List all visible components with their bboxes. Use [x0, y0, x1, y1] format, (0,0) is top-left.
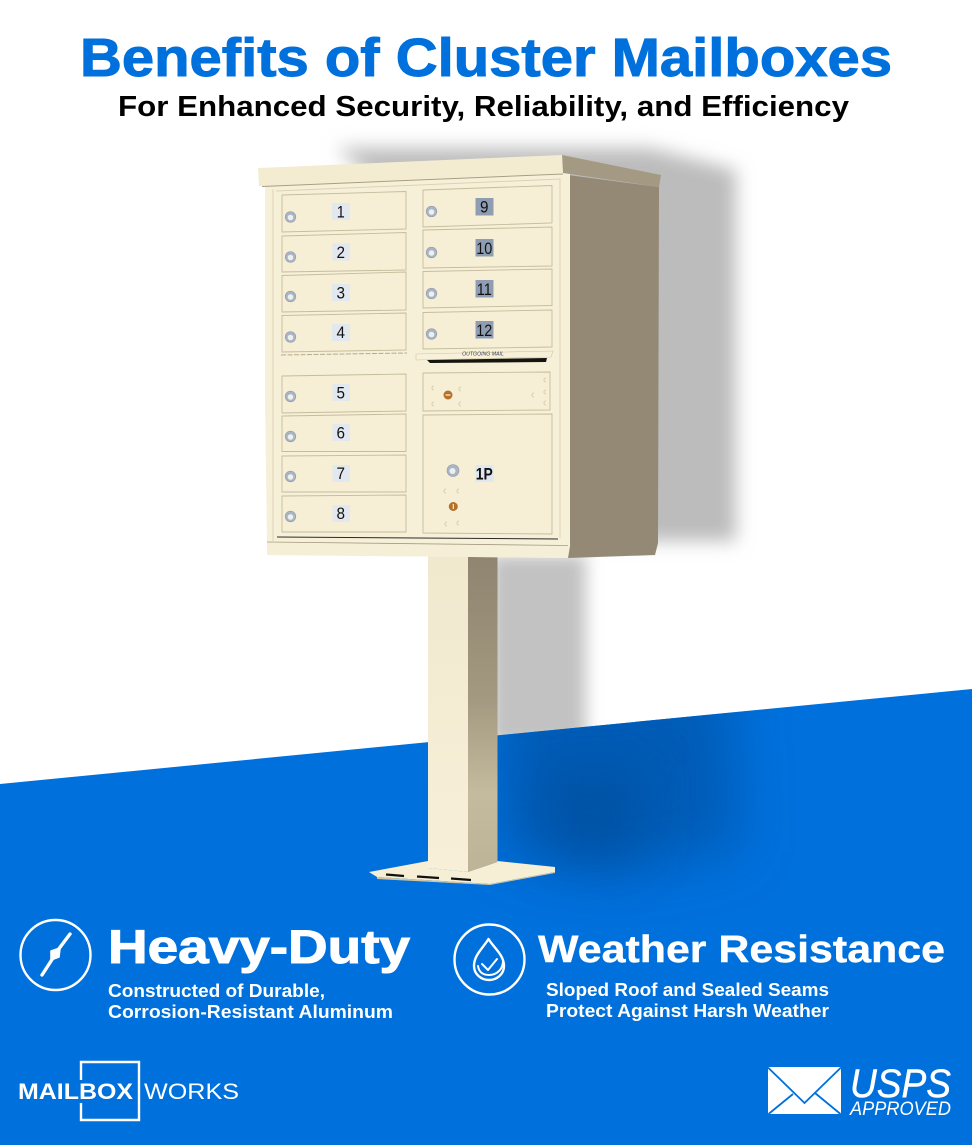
text: heavy-duty description: Constructed of Durable,: [108, 981, 325, 1001]
left column doors: [281, 192, 407, 532]
door number labels: 3: [337, 284, 345, 302]
post shadow on ground: [500, 680, 740, 872]
heading: weather resistance: Weather Resistance: [538, 929, 945, 971]
logo: mailbox works: [18, 1062, 239, 1120]
logo: mailbox works: WORKS: [144, 1079, 239, 1104]
cast shadow of mailbox on wall: [336, 148, 736, 541]
cast shadow of post on wall: [490, 555, 586, 745]
roof front: [258, 155, 563, 186]
door number labels: 5: [337, 385, 345, 403]
cluster mailbox unit: [258, 155, 661, 885]
brass service locks: [432, 378, 546, 526]
cabinet side: [568, 175, 659, 558]
pedestal post: [428, 556, 498, 872]
post base plate: [369, 861, 555, 885]
right column doors: [423, 186, 552, 534]
door number labels: 2: [337, 244, 345, 262]
blue ground panel: [0, 689, 972, 1145]
benefit: weather resistance: [454, 924, 945, 1021]
door number labels: 9: [480, 199, 489, 217]
cabinet base lip: [267, 537, 568, 558]
door number labels: 8: [337, 505, 345, 523]
roof side: [562, 155, 661, 187]
cabinet front: [265, 172, 570, 558]
door locks: [285, 206, 459, 522]
icon: lightning bolt in circle: [20, 920, 90, 990]
door number labels: 7: [337, 465, 345, 483]
text: weather resistance description: [546, 980, 829, 1021]
text: heavy-duty description: [108, 981, 393, 1022]
text: usps: USPS: [850, 1062, 951, 1106]
roof underside line: [262, 174, 563, 186]
text: weather resistance description: Protect Against Harsh Weather: [546, 1001, 829, 1021]
door number labels: 10: [476, 240, 492, 258]
door number labels: 1P: [476, 466, 493, 484]
logo: mailbox works: MAILBOX: [18, 1079, 133, 1104]
benefit: heavy-duty: [20, 920, 410, 1022]
door number labels: 4: [337, 324, 345, 342]
door number labels: [332, 198, 494, 523]
text: heavy-duty description: Corrosion-Resistant Aluminum: [108, 1002, 393, 1022]
inner frame: [273, 178, 560, 541]
text: weather resistance description: Sloped Roof and Sealed Seams: [546, 980, 829, 1000]
subtitle: For Enhanced Security, Reliability, and Efficiency: [118, 91, 849, 123]
outgoing mail slot: OUTGOING MAIL: [462, 352, 504, 358]
text: approved: APPROVED: [849, 1099, 951, 1120]
title: Benefits of Cluster Mailboxes: [80, 28, 892, 88]
door number labels: 1: [337, 204, 345, 222]
heading: heavy-duty: Heavy-Duty: [108, 920, 410, 973]
badge: usps approved: [768, 1062, 951, 1120]
icon: water drop in circle: [454, 924, 524, 994]
door number labels: 12: [476, 322, 492, 340]
outgoing mail slot: [416, 351, 553, 363]
door number labels: 6: [337, 425, 345, 443]
door number labels: 11: [477, 281, 492, 299]
icon: envelope: [768, 1067, 841, 1114]
